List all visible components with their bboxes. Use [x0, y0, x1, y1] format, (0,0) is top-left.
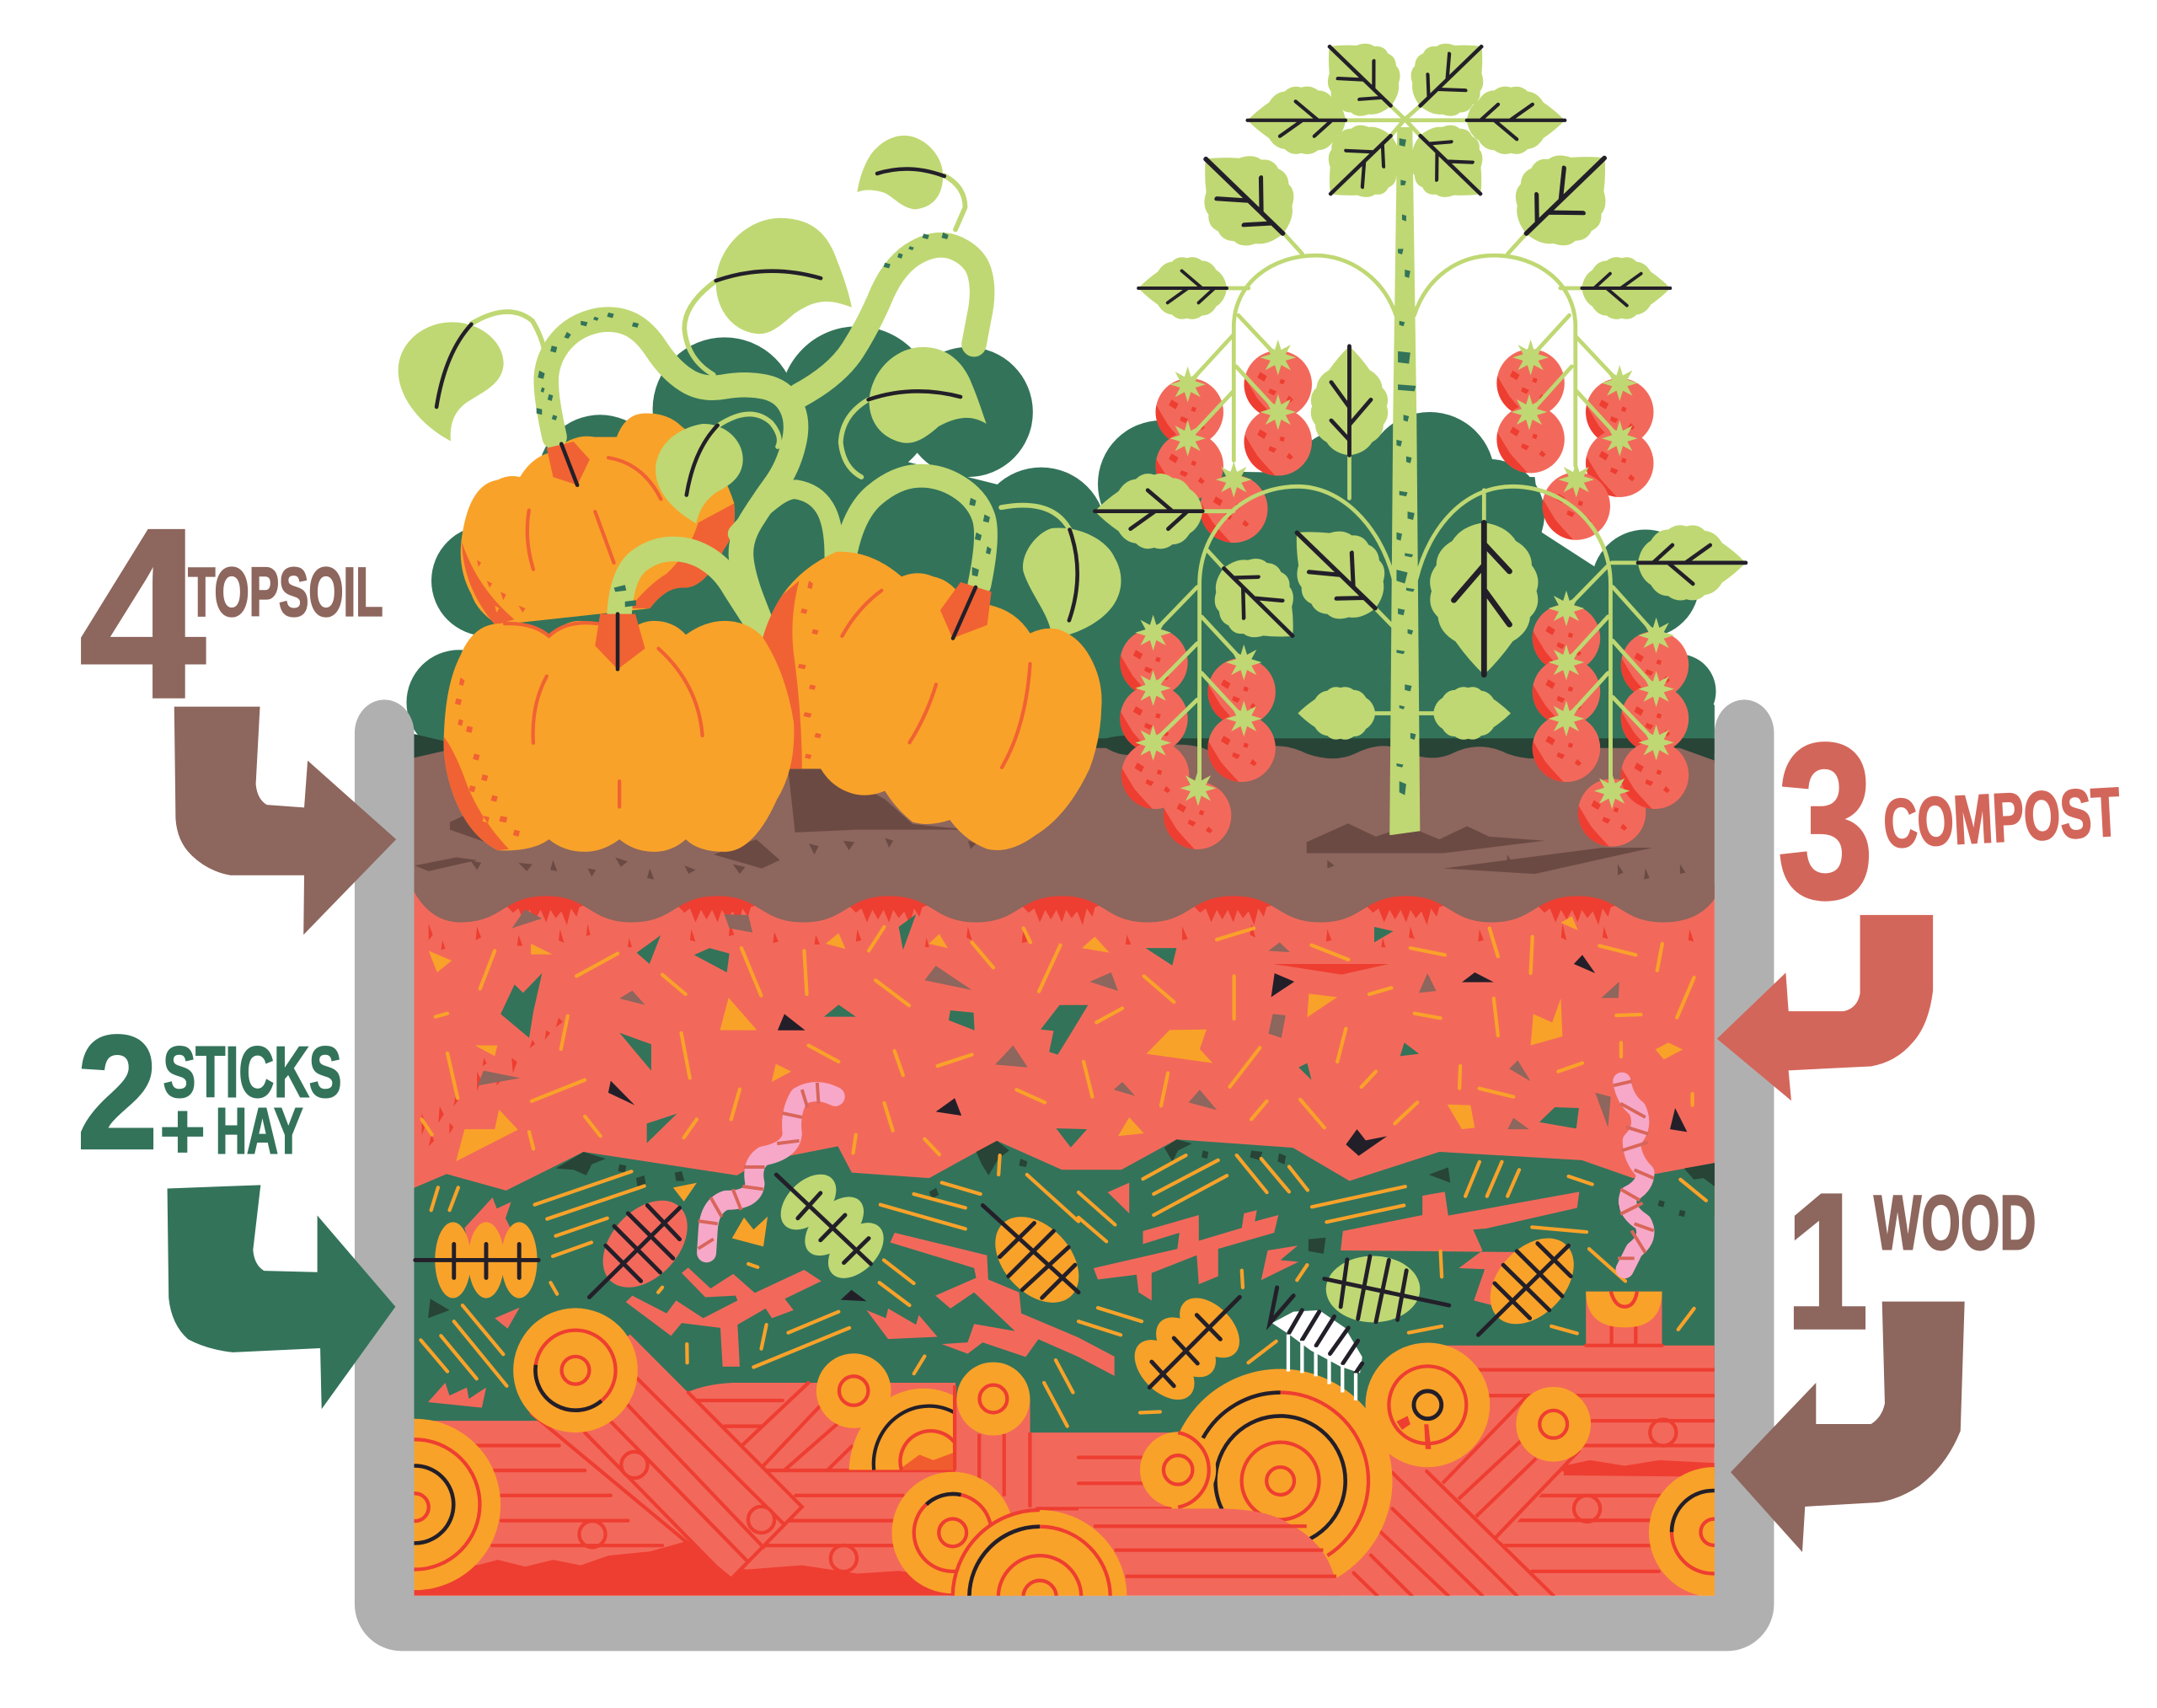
bug: white pill bug — [1270, 1288, 1362, 1400]
soil mounds and shadows — [415, 768, 1652, 874]
diagonal log lines lower right — [1328, 1470, 1555, 1596]
hay strands — [420, 1155, 1706, 1427]
shadow band under the foliage — [409, 733, 1715, 763]
log base — [414, 1292, 1715, 1596]
upper tomatoes: left and right clusters — [1156, 349, 1654, 543]
label: 2 sticks + hay — [78, 1004, 341, 1182]
dark green shards — [428, 1167, 1450, 1318]
brown confetti — [478, 909, 1619, 1129]
label: 1 wood: 1 — [1785, 1154, 1868, 1369]
ribs — [527, 458, 661, 570]
worm: right — [1614, 1081, 1654, 1269]
bottom red grain — [414, 1460, 1715, 1596]
leaf: red hatched — [586, 1184, 704, 1304]
vine: main from back pumpkin — [546, 319, 796, 625]
stars lower — [1135, 591, 1674, 809]
leaf: orange wavy — [1123, 1287, 1250, 1411]
label: 4 topsoil — [79, 478, 383, 748]
leaf: small on back pumpkin — [656, 424, 743, 523]
tomato leaves — [1095, 20, 1746, 740]
label: 2 sticks + hay: + — [159, 1087, 206, 1176]
green confetti — [500, 914, 1579, 1148]
label: 1 wood: WOOD — [1874, 1181, 2037, 1266]
speckle left edge — [462, 542, 526, 625]
small log-end rings — [579, 1420, 1676, 1571]
orange confetti — [429, 916, 1683, 1161]
leaf: orange hatched right — [1474, 1222, 1590, 1340]
ribs — [842, 591, 1030, 768]
big disc center — [1169, 1369, 1393, 1593]
layer: wood logs — [415, 1291, 1715, 1596]
orange straw pieces — [422, 927, 1694, 1154]
arrow: sticks and hay — [168, 1185, 395, 1409]
vine speckles — [537, 233, 992, 607]
layer: compost — [414, 885, 1715, 1217]
stem line — [953, 587, 976, 639]
label: 3 compost — [1778, 699, 2122, 945]
bush foliage behind the tomato plant — [1095, 412, 1716, 753]
black confetti — [608, 955, 1687, 1156]
leaf: far left — [399, 322, 504, 441]
dark speckle along the ridge — [556, 1139, 1715, 1217]
half disc on small square log — [1586, 1292, 1662, 1327]
label: 4 topsoil: 4 — [79, 478, 207, 748]
back pumpkin stem — [547, 442, 590, 485]
stem — [940, 582, 992, 639]
vine: arch to right stem — [845, 476, 986, 585]
label: 3 compost: 3 — [1778, 699, 1874, 945]
disc lower middle — [891, 1472, 1014, 1593]
tomato plant — [1095, 20, 1746, 849]
worm: left — [698, 1083, 835, 1253]
leaf: far right pumpkin — [1023, 527, 1121, 639]
layer: sticks and hay — [414, 1139, 1715, 1445]
label: 2 sticks + hay: HAY — [216, 1095, 302, 1168]
raised bed grey frame — [355, 699, 1774, 1651]
diagonal log left — [531, 1335, 802, 1579]
plant branches and arcs — [1153, 106, 1657, 778]
stars upper — [1169, 340, 1638, 497]
disc right edge — [1648, 1467, 1715, 1596]
salmon sticks — [428, 1183, 1579, 1408]
pumpkin: front — [444, 614, 794, 852]
leaf: orange three-lobed — [415, 1222, 538, 1298]
lower tomatoes — [1120, 604, 1689, 849]
vine: arch to front stem — [619, 549, 762, 630]
soil speckle — [470, 838, 1685, 880]
red speckled band under the soil — [422, 893, 1694, 1146]
half disc at back middle — [849, 1389, 955, 1470]
ribs — [505, 623, 703, 807]
pumpkin: right — [762, 552, 1102, 850]
disc log end — [816, 1353, 891, 1428]
small disc beside big disc — [1140, 1432, 1216, 1508]
vertical log — [955, 1363, 1030, 1516]
tendrils — [472, 175, 1069, 530]
layer: topsoil — [414, 745, 1715, 923]
orange shards — [673, 1183, 768, 1246]
pumpkin: back left — [461, 414, 735, 625]
stem speckles — [1396, 138, 1416, 795]
leaf: large top middle — [716, 218, 852, 334]
leaf: top — [857, 136, 945, 209]
dome log front — [1078, 1508, 1339, 1596]
leaf: mid right over bush — [869, 347, 987, 443]
disc bottom-left corner — [415, 1419, 500, 1591]
leaf: orange hatched middle — [979, 1201, 1095, 1319]
speckled left shading — [762, 581, 822, 768]
arrow: wood — [1731, 1302, 1965, 1552]
stem line — [617, 614, 618, 669]
label: 4 topsoil: TOPSOIL — [188, 554, 383, 630]
red log grain lines — [475, 1325, 1715, 1571]
arrow: compost — [1717, 915, 1933, 1100]
disc right log end — [1475, 1387, 1591, 1542]
darker right edge — [629, 503, 735, 608]
big half disc bottom — [950, 1508, 1127, 1596]
vine: upward to top leaf — [800, 245, 982, 395]
arrow: topsoil — [174, 707, 396, 934]
label: 2 sticks + hay: STICKS — [163, 1032, 341, 1112]
label: 1 wood — [1785, 1154, 2037, 1369]
small shards in the hay — [841, 1290, 866, 1301]
main stem — [1389, 127, 1420, 835]
bush foliage behind the pumpkins — [406, 326, 1120, 755]
lower stems redrawn over tomatoes — [1153, 617, 1657, 791]
vine: small loop — [737, 490, 834, 557]
vines — [472, 175, 1069, 630]
disc top-left big — [513, 1308, 638, 1432]
disc with black centre — [1366, 1342, 1490, 1467]
leaf: green veined — [1325, 1256, 1449, 1322]
speckled left shading — [444, 677, 520, 850]
stem — [595, 614, 645, 669]
label: 2 sticks + hay: 2 — [78, 1004, 158, 1182]
leaf: green wavy — [770, 1164, 894, 1288]
